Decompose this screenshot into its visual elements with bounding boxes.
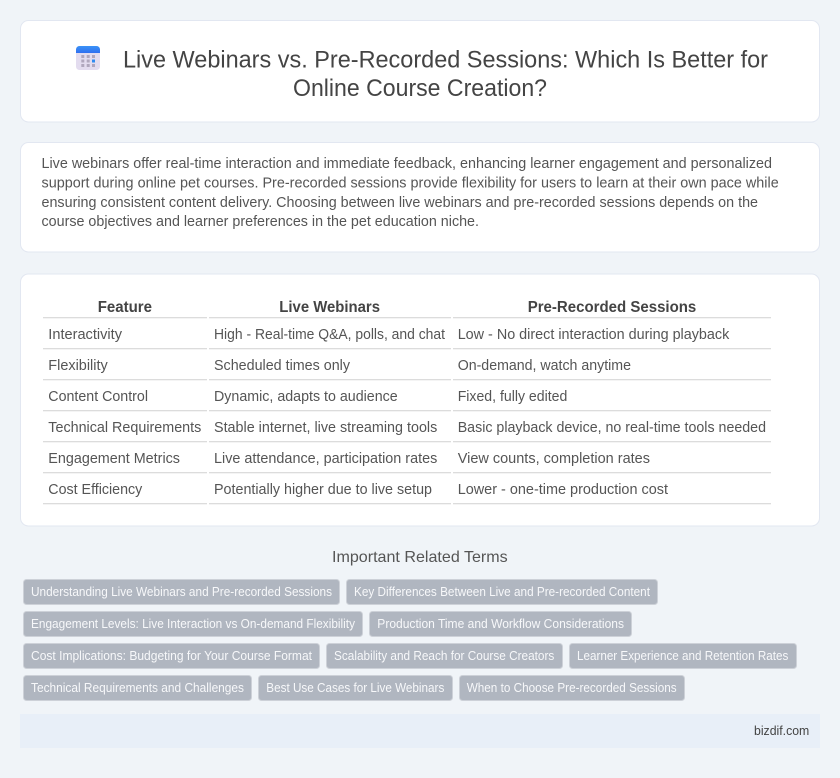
table row: content control: [43, 389, 771, 411]
chip: Best Use Cases for Live Webinars: [266, 680, 445, 695]
icon: calendar: [76, 46, 100, 70]
chip: [460, 676, 684, 700]
chip: [24, 580, 340, 604]
table row: content control: Dynamic, adapts to audience: [214, 389, 398, 405]
title: Live Webinars vs. Pre-Recorded Sessions: Which Is Better for: [123, 46, 768, 74]
table header row: Feature: [98, 299, 152, 316]
chip: Production Time and Workflow Considerations: [377, 616, 624, 631]
table row: interactivity: High - Real-time Q&A, polls, and chat: [214, 327, 445, 343]
table row: flexibility: [43, 358, 771, 380]
table row: cost efficiency: Lower - one-time production cost: [458, 482, 668, 498]
footer text: site name: bizdif.com: [754, 723, 809, 738]
text block: summary paragraph: [42, 156, 779, 230]
table row: engagement metrics: Live attendance, participation rates: [214, 451, 437, 467]
chip: When to Choose Pre-recorded Sessions: [467, 680, 677, 695]
table row: flexibility: Scheduled times only: [214, 358, 351, 374]
chip: Scalability and Reach for Course Creators: [334, 648, 555, 663]
chip: [570, 644, 796, 668]
chip: [258, 676, 452, 700]
text block: summary paragraph: course objectives and learner preferences in the pet education niche.: [42, 214, 479, 230]
table row: technical requirements: [43, 420, 771, 442]
table row: content control: Fixed, fully edited: [458, 389, 567, 405]
text block: summary paragraph: ensuring consistent content delivery. Choosing between live webinars and pre-recorded sessions depends on the: [42, 195, 758, 211]
table row: flexibility: On-demand, watch anytime: [458, 358, 631, 374]
chip: Engagement Levels: Live Interaction vs On-demand Flexibility: [31, 616, 355, 631]
title: Online Course Creation?: [293, 75, 547, 102]
table row: technical requirements: Basic playback device, no real-time tools needed: [458, 420, 766, 436]
text block: summary paragraph: Live webinars offer real-time interaction and immediate feedback, enhancing learner engagement and personalized: [42, 156, 772, 172]
heading: important related terms: Important Related Terms: [332, 549, 508, 566]
text block: summary paragraph: support during online pet courses. Pre-recorded sessions provide flexibility for users to learn at their own pace while: [42, 176, 779, 192]
table row: cost efficiency: Cost Efficiency: [48, 482, 143, 498]
table row: flexibility: Flexibility: [48, 358, 108, 374]
chip: [24, 676, 252, 700]
chip: Understanding Live Webinars and Pre-recorded Sessions: [31, 584, 332, 599]
table row: engagement metrics: [43, 451, 771, 473]
chip: [24, 644, 320, 668]
panel: comparison table: [20, 274, 820, 526]
chip: Technical Requirements and Challenges: [31, 680, 244, 695]
table header row: Pre-Recorded Sessions: [528, 299, 696, 316]
table row: technical requirements: Technical Requirements: [48, 420, 201, 436]
table row: cost efficiency: Potentially higher due to live setup: [214, 482, 432, 498]
chip: Cost Implications: Budgeting for Your Course Format: [31, 648, 312, 663]
table header row: Live Webinars: [279, 299, 380, 316]
chip: [370, 612, 632, 636]
panel: header: [20, 20, 820, 122]
table row: technical requirements: Stable internet, live streaming tools: [214, 420, 437, 436]
table row: content control: Content Control: [48, 389, 148, 405]
table row: interactivity: Low - No direct interaction during playback: [458, 327, 730, 343]
title: [123, 46, 768, 102]
table row: engagement metrics: View counts, completion rates: [458, 451, 650, 467]
footer bar: [20, 714, 820, 748]
table row: engagement metrics: Engagement Metrics: [48, 451, 180, 467]
chip: Learner Experience and Retention Rates: [577, 648, 789, 663]
chip: [346, 580, 658, 604]
table header row: [43, 299, 771, 318]
table row: interactivity: [43, 327, 771, 349]
chip: [24, 612, 362, 636]
chip: [326, 644, 562, 668]
table row: cost efficiency: [43, 482, 771, 504]
panel: summary: [20, 142, 820, 252]
related term chips: [24, 580, 796, 700]
chip: Key Differences Between Live and Pre-recorded Content: [354, 584, 650, 599]
table row: interactivity: Interactivity: [48, 327, 123, 343]
